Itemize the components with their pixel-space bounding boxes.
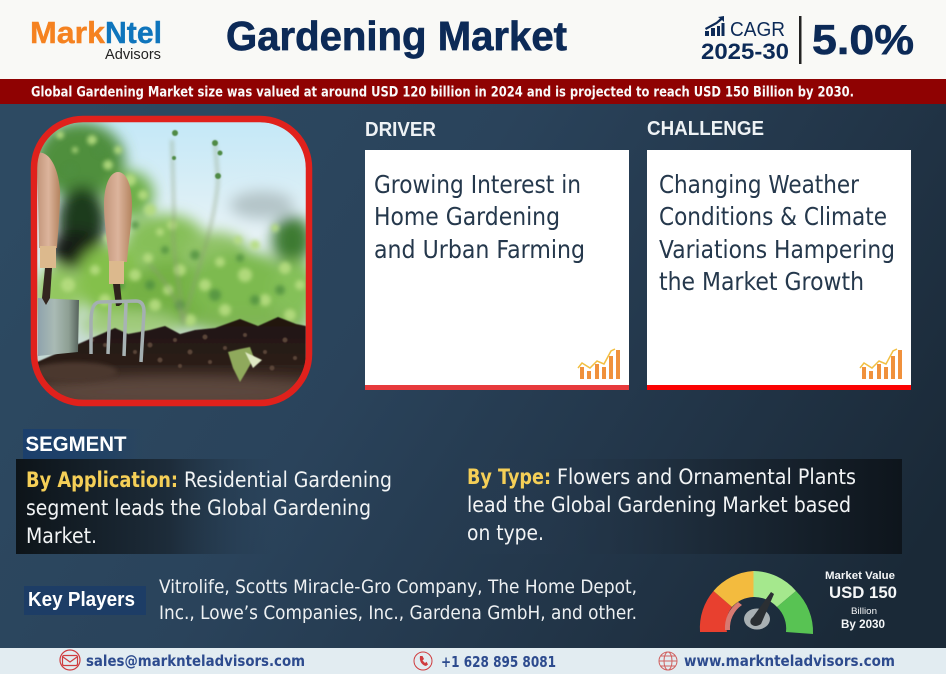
title: Gardening Market <box>226 13 567 59</box>
key players label: Key Players <box>28 589 135 611</box>
logo: MarkNtel Advisors: Mark <box>30 15 106 50</box>
heading: segment: SEGMENT <box>26 433 127 456</box>
panel: by application: Market. <box>26 524 97 549</box>
panel: by type: lead the Global Gardening Market based <box>467 493 851 518</box>
panel: by type <box>460 459 902 554</box>
trowel <box>38 298 79 356</box>
CAGR block: 5.0% <box>812 16 914 63</box>
icon: growth bars <box>705 16 724 36</box>
panel: by application: By Application: <box>26 468 178 493</box>
key players list: Inc., Lowe’s Companies, Inc., Gardena GmbH, and other. <box>159 602 637 624</box>
market value text: USD 150 <box>829 583 897 602</box>
icon: orange bar chart <box>578 349 620 379</box>
market value text: By 2030 <box>841 619 885 631</box>
challenge text: the Market Growth <box>659 267 864 296</box>
email address: sales@marknteladvisors.com <box>86 652 305 670</box>
gauge hub and needle <box>744 608 770 630</box>
phone number: +1 628 895 8081 <box>441 653 556 671</box>
driver text: Growing Interest in <box>374 170 581 199</box>
panel: by type: By Type: <box>467 465 551 490</box>
icon: globe <box>659 652 677 670</box>
panel: by application: segment leads the Global Gardening <box>26 496 371 521</box>
driver text: Home Gardening <box>374 202 560 231</box>
heading: segment <box>23 429 153 459</box>
key players list: Vitrolife, Scotts Miracle-Gro Company, The Home Depot, <box>159 576 637 598</box>
website: www.marknteladvisors.com <box>684 652 895 670</box>
header band <box>0 0 946 79</box>
foliage highlights <box>56 131 305 326</box>
icon: orange bar chart <box>860 349 902 379</box>
logo: MarkNtel Advisors <box>30 15 162 63</box>
soil <box>37 317 306 400</box>
CAGR block: 2025-30 <box>701 39 789 64</box>
driver text <box>374 170 585 264</box>
market value text: Market Value <box>825 570 895 582</box>
icon: email <box>60 650 80 670</box>
photo: garden tools in soil <box>30 119 330 408</box>
fork <box>104 172 132 262</box>
icon: phone <box>414 652 432 670</box>
driver text: and Urban Farming <box>374 235 585 264</box>
panel: driver <box>365 119 629 390</box>
challenge text: Changing Weather <box>659 170 860 199</box>
panel: challenge <box>647 118 911 390</box>
panel: by type: on type. <box>467 521 544 546</box>
heading: driver: DRIVER <box>365 119 437 141</box>
footer bar <box>0 648 946 674</box>
heading: challenge: CHALLENGE <box>647 118 764 140</box>
red summary banner <box>0 79 946 104</box>
seedling <box>228 347 254 382</box>
key players list <box>159 576 637 624</box>
logo: MarkNtel Advisors: Ntel <box>105 15 162 50</box>
market value text <box>825 570 897 631</box>
CAGR block <box>701 16 914 64</box>
panel: by application: Residential Gardening <box>184 468 392 493</box>
CAGR block: CAGR <box>730 19 785 41</box>
challenge text <box>659 170 895 296</box>
gauge <box>700 571 813 634</box>
panel: by application <box>16 459 392 554</box>
challenge text: Variations Hampering <box>659 235 895 264</box>
challenge text: Conditions & Climate <box>659 202 887 231</box>
panel: by type: Flowers and Ornamental Plants <box>557 465 856 490</box>
market value text: Billion <box>851 606 877 617</box>
logo: MarkNtel Advisors: Advisors <box>105 46 161 63</box>
